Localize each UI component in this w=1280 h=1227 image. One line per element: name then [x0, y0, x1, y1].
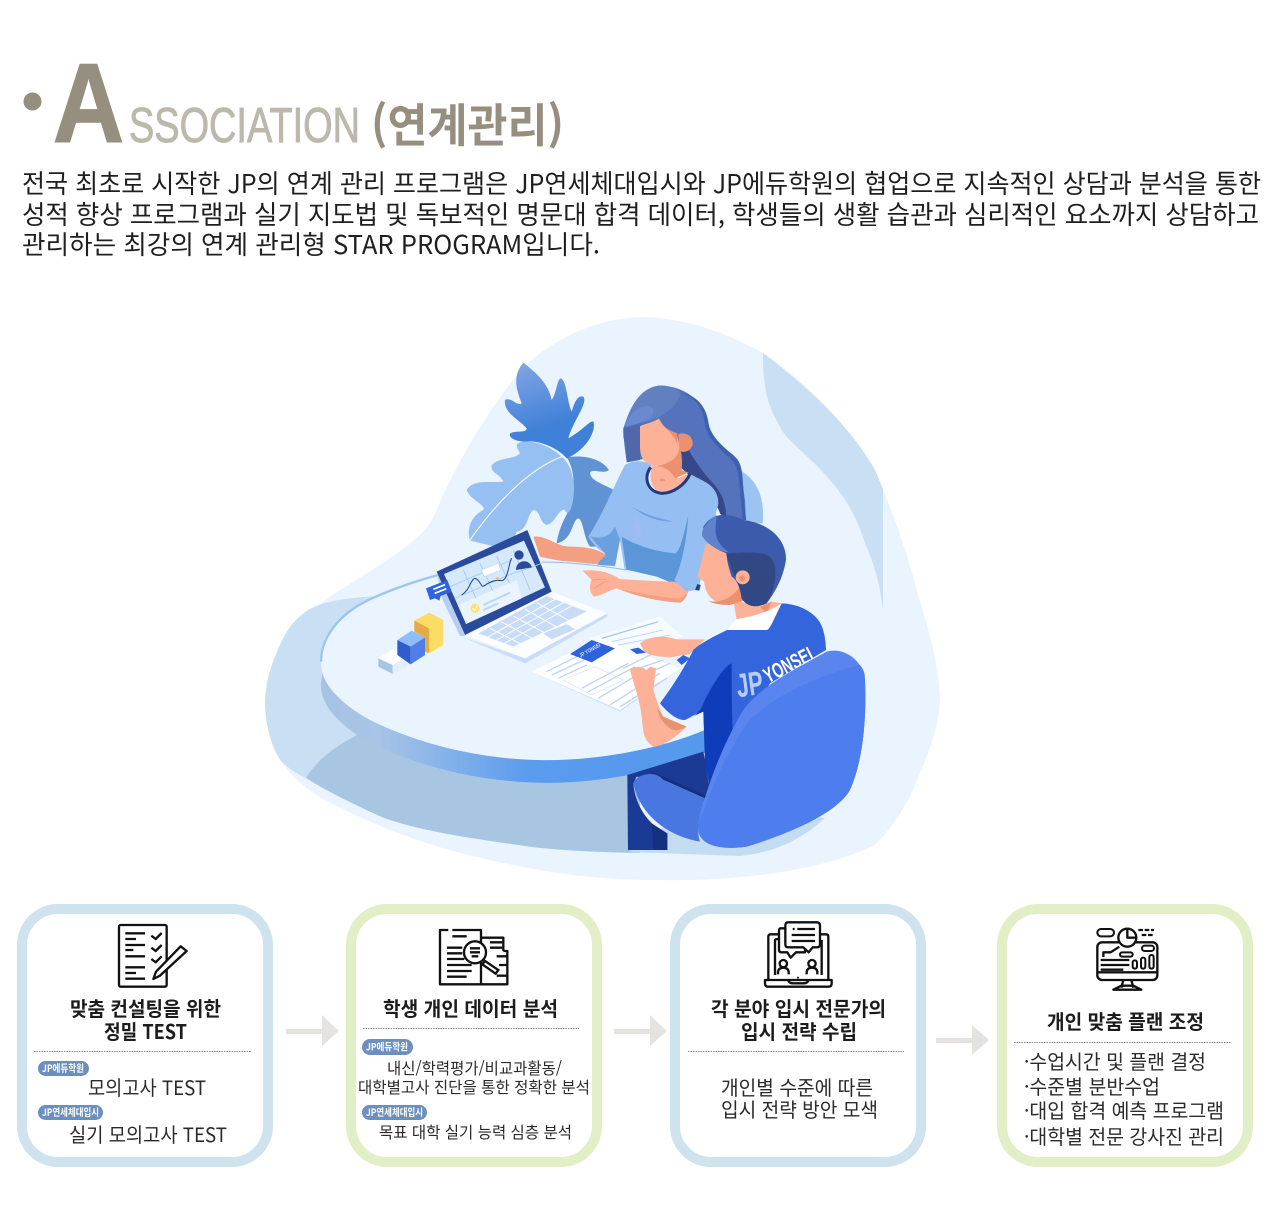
hairline shade: [659, 418, 677, 447]
seat: [633, 774, 705, 842]
laptop base edge: [460, 613, 607, 663]
leaf left: [467, 441, 574, 550]
title: [24, 41, 564, 166]
screen lower panel: [458, 580, 522, 624]
shirt fold: [630, 505, 673, 522]
leaf vein: [470, 457, 562, 540]
title bullet dot: [24, 92, 42, 110]
documents: [532, 617, 690, 712]
ear: [678, 433, 693, 452]
panel: consulting test: 정밀 TEST: [104, 1016, 187, 1045]
shirt logo JP: JP: [734, 665, 766, 705]
title Korean label: (연계관리): [371, 90, 564, 156]
panel title: 학생 개인 데이터 분석: [383, 993, 558, 1022]
blue cube: [397, 631, 425, 647]
panel title: 맞춤 컨설팅을 위한: [70, 993, 221, 1022]
dotted divider: [363, 1028, 579, 1030]
analysis description: 내신/학력평가/비교과활동/: [387, 1055, 563, 1079]
keyboard: [478, 596, 587, 647]
white cube: [378, 649, 407, 665]
bar cubes: [378, 613, 443, 674]
forearm: [630, 667, 687, 747]
panel: consulting test: [22, 909, 268, 1162]
dotted divider: [34, 1050, 251, 1052]
front sheet: [532, 638, 680, 710]
woman left arm: [533, 537, 606, 564]
panel frame: [351, 909, 597, 1162]
plan bullet list: ·대입 합격 예측 프로그램: [1024, 1095, 1224, 1124]
icon: documents and magnifier: [440, 930, 507, 984]
yellow cube: [414, 613, 443, 628]
hair right edge: [680, 393, 746, 520]
strategy description: [721, 1072, 878, 1123]
panel: student data analysis: [351, 909, 597, 1162]
table rim: [321, 583, 737, 783]
plant leaves: [467, 363, 617, 550]
finger lines: [592, 579, 608, 588]
title word SSOCIATION: SSOCIATION: [129, 99, 360, 153]
check badge: [470, 604, 480, 613]
woman right arm and hand: [583, 502, 718, 603]
chat bubble lines: [433, 585, 446, 593]
panel frame: [675, 909, 921, 1162]
target college text: 목표 대학 실기 능력 심층 분석: [379, 1119, 572, 1143]
screen text lines: [483, 593, 510, 610]
front sheet lines: [547, 653, 670, 707]
plan bullet list: ·수준별 분반수업: [1024, 1071, 1160, 1100]
head: [697, 543, 743, 604]
icon: laptop with speech bubbles: [765, 922, 832, 987]
icon: monitor dashboard: [1097, 929, 1157, 990]
table: [321, 560, 737, 783]
top right swoosh: [763, 353, 883, 610]
sleeve shade: [590, 527, 620, 566]
table top edge line: [321, 575, 438, 662]
mock test text: 모의고사 TEST: [88, 1072, 206, 1101]
blue card: [570, 640, 615, 662]
jaw shade: [708, 587, 744, 605]
floor shadow: [306, 735, 640, 853]
left swoosh: [265, 596, 378, 778]
shirt shade: [685, 663, 733, 787]
screen: [444, 541, 545, 624]
hair: [703, 515, 786, 606]
hair shade: [680, 440, 726, 520]
plan bullet list: [1024, 1046, 1224, 1150]
hair crown: [624, 386, 681, 427]
face: [640, 418, 680, 465]
intro paragraph: 전국 최초로 시작한 JP의 연계 관리 프로그램은 JP연세체대입시와 JP에듀학원의 협업으로 지속적인 상담과 분석을 통한: [22, 164, 1261, 201]
arrow: [936, 1025, 989, 1055]
badge: JP연세체대입시: JP연세체대입시: [366, 1104, 423, 1119]
hair shade: [726, 552, 776, 606]
panel frame: [1002, 909, 1248, 1162]
intro paragraph: 성적 향상 프로그램과 실기 지도법 및 독보적인 명문대 합격 데이터, 학생들의 생활 습관과 심리적인 요소까지 상담하고: [22, 195, 1259, 232]
shirt logo YONSEI: YONSEI: [759, 642, 817, 688]
practical test text: 실기 모의고사 TEST: [69, 1119, 227, 1148]
backrest: [698, 665, 865, 848]
neck shadow: [656, 448, 688, 478]
ear inner: [739, 575, 745, 581]
lower shirt shade: [622, 515, 688, 583]
man: [627, 515, 826, 850]
background blob: [265, 317, 940, 880]
panel: expert strategy: [675, 909, 921, 1162]
screen chart card: [482, 563, 501, 577]
table back edge line: [542, 562, 627, 570]
table top: [321, 560, 737, 760]
neck: [733, 600, 782, 622]
back sheet: [588, 617, 683, 650]
hair: [623, 386, 746, 520]
front sheet shadow: [532, 669, 680, 712]
chart marker: [496, 577, 499, 580]
analysis description: 대학별고사 진단을 통한 정확한 분석: [358, 1074, 590, 1098]
waist shadow: [695, 584, 701, 591]
chat bubble: [426, 580, 452, 601]
forearm shade: [620, 589, 687, 603]
chest: [650, 463, 689, 493]
card label: JP YONSEI: [579, 642, 602, 659]
ear: [736, 570, 750, 584]
floor shadow right of chair: [629, 800, 825, 856]
neck shade: [760, 602, 772, 614]
hair highlight: [624, 406, 654, 427]
dotted divider: [1014, 1042, 1231, 1044]
collar: [647, 467, 690, 493]
leg shadow: [650, 771, 708, 850]
trackpad: [543, 624, 575, 639]
right sleeve: [674, 502, 718, 592]
shirt: [588, 461, 718, 590]
hair under left: [623, 423, 642, 462]
panel title: 개인 맞춤 플랜 조정: [1047, 1006, 1204, 1035]
intro paragraph: 관리하는 최강의 연계 관리형 STAR PROGRAM입니다.: [22, 225, 600, 262]
upper hand: [640, 637, 705, 657]
leaf top: [505, 363, 594, 458]
screen grid: [450, 550, 542, 598]
chair: [633, 651, 865, 848]
chair back behind woman: [737, 470, 763, 523]
icon: checklist and pen: [119, 925, 187, 987]
hair front: [702, 515, 729, 552]
screen frame: [437, 530, 552, 635]
keyboard grid: [487, 599, 572, 646]
blue marks: [630, 648, 690, 665]
strategy description: 개인별 수준에 따른: [721, 1072, 873, 1101]
intro paragraph: [22, 164, 1261, 262]
form outline: [563, 667, 623, 695]
screen avatar: [514, 550, 532, 570]
clavicle: [660, 479, 665, 481]
laptop base: [465, 592, 607, 658]
backrest edge: [698, 651, 865, 848]
panel frame: [22, 909, 268, 1162]
back sheet lines: [602, 622, 658, 638]
plan bullet list: ·수업시간 및 플랜 결정: [1024, 1046, 1206, 1075]
collar: [727, 603, 782, 630]
check mark: [473, 606, 477, 610]
shirt: [660, 603, 826, 783]
illustration: consultation at table: [265, 317, 940, 880]
leaf right: [557, 456, 617, 547]
analysis description: [358, 1055, 590, 1098]
badge: JP에듀학원: JP에듀학원: [366, 1038, 408, 1054]
arrow: [614, 1015, 667, 1046]
underarm shade: [632, 513, 642, 537]
legs: [627, 752, 710, 850]
panel: personal plan: [1002, 909, 1248, 1162]
laptop: [426, 530, 607, 663]
plan bullet list: ·대학별 전문 강사진 관리: [1024, 1121, 1224, 1150]
arrow: [286, 1015, 339, 1046]
panel title: 각 분야 입시 전문가의: [711, 993, 886, 1022]
title initial A: A: [53, 41, 124, 166]
panel: expert strategy: 입시 전략 수립: [741, 1016, 857, 1045]
dotted divider: [688, 1050, 904, 1052]
badge: JP연세체대입시: JP연세체대입시: [42, 1104, 99, 1119]
badge: JP에듀학원: JP에듀학원: [42, 1060, 84, 1075]
screen back shadow: [437, 572, 465, 636]
forearm shade: [657, 708, 687, 730]
strategy description: 입시 전략 방안 모색: [721, 1094, 878, 1123]
woman: [533, 386, 763, 590]
chart line: [462, 558, 512, 595]
